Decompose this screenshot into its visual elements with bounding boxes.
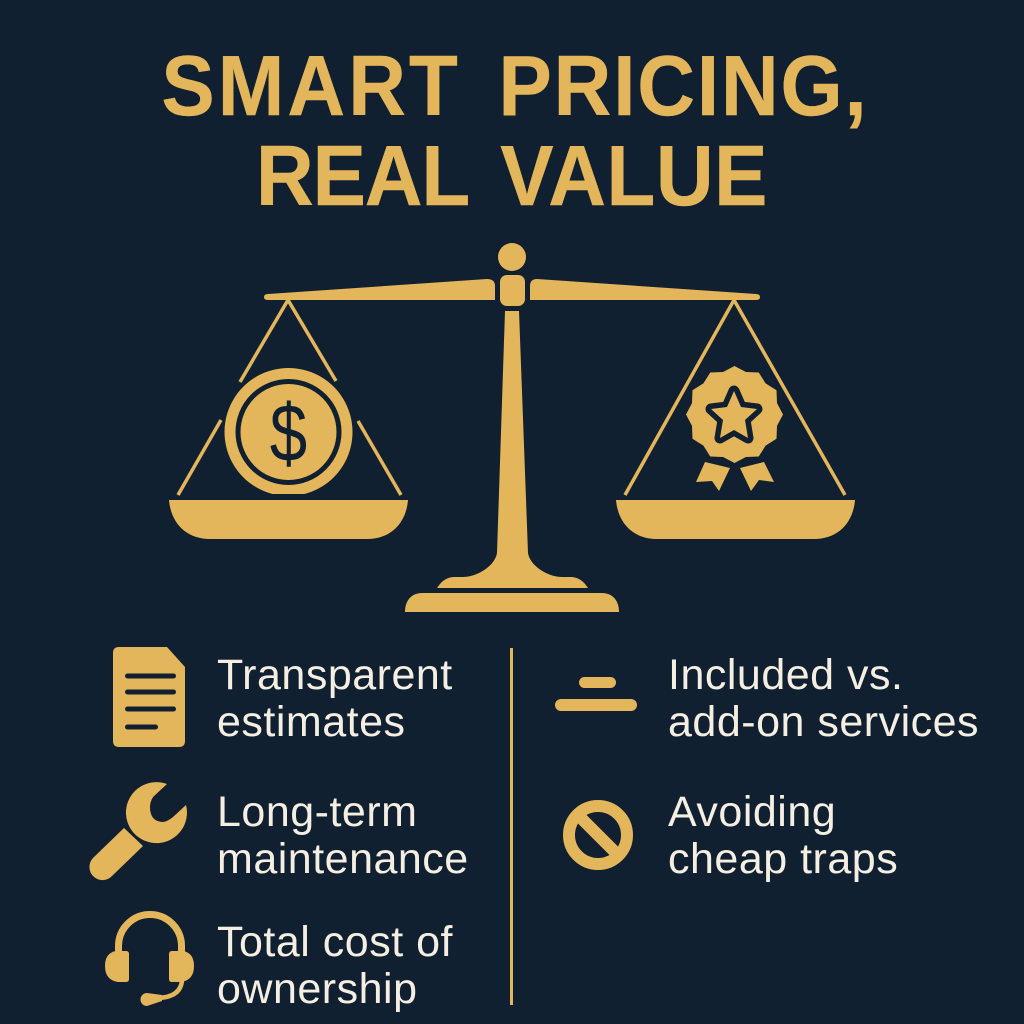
title: REAL VALUE bbox=[256, 129, 768, 224]
label: avoiding cheap traps: cheap traps bbox=[668, 835, 898, 883]
title bbox=[161, 39, 869, 224]
label: included vs add-on services: Included vs. bbox=[668, 651, 903, 699]
icon: dollar coin: $ bbox=[270, 387, 307, 478]
label: transparent estimates bbox=[217, 651, 453, 746]
title: SMART PRICING, bbox=[161, 39, 869, 134]
icon: wrench bbox=[89, 782, 187, 880]
label: included vs add-on services bbox=[668, 651, 979, 746]
icon: prohibited bbox=[569, 806, 627, 864]
label: total cost of ownership: ownership bbox=[217, 965, 418, 1013]
label: included vs add-on services: add-on services bbox=[668, 698, 979, 746]
icon: award badge bbox=[686, 366, 783, 491]
icon: document bbox=[113, 647, 185, 747]
icon: minus lines bbox=[555, 677, 637, 711]
balance scale bbox=[169, 243, 855, 612]
label: avoiding cheap traps: Avoiding bbox=[668, 788, 836, 836]
label: transparent estimates: estimates bbox=[217, 698, 406, 746]
icon: headset bbox=[105, 915, 194, 1006]
label: avoiding cheap traps bbox=[668, 788, 898, 883]
icon: dollar coin bbox=[224, 368, 353, 494]
center divider bbox=[510, 648, 513, 1005]
label: total cost of ownership: Total cost of bbox=[217, 918, 453, 966]
label: total cost of ownership bbox=[217, 918, 453, 1013]
label: transparent estimates: Transparent bbox=[217, 651, 453, 699]
label: long-term maintenance bbox=[217, 788, 469, 883]
label: long-term maintenance: maintenance bbox=[217, 835, 469, 883]
label: long-term maintenance: Long-term bbox=[217, 788, 417, 836]
